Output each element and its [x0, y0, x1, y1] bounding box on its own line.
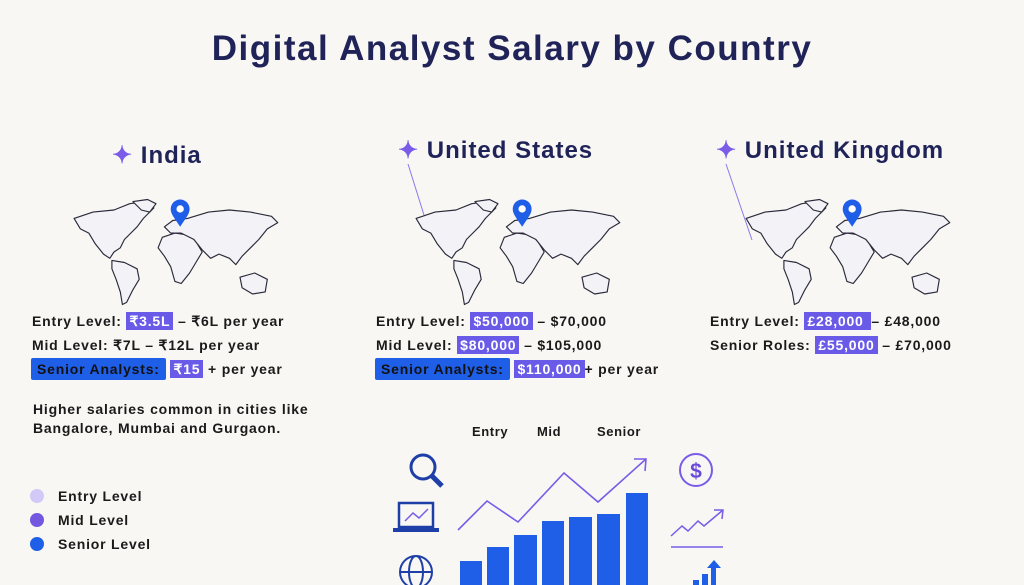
icon: magnifier: [411, 455, 442, 486]
chart: bar chart with trend: [393, 424, 724, 585]
legend: Entry Level: [58, 488, 142, 504]
map: UK: [746, 198, 950, 306]
note: Higher salaries common in cities like: [33, 401, 308, 417]
salary lines: Entry Level: ₹3.5L – ₹6L per year: [32, 313, 284, 329]
panel: United States: Mid Level: $80,000 – $105,000: [376, 337, 602, 353]
panel: India: Mid Level: ₹7L – ₹12L per year: [32, 337, 260, 353]
chart labels: Entry: [472, 424, 508, 439]
legend: [30, 488, 151, 552]
note: [33, 401, 308, 436]
bars: [460, 493, 648, 585]
chart labels: Senior: [597, 424, 641, 439]
legend: Senior Level: [58, 536, 151, 552]
salary lines: Entry Level: £28,000 – £48,000: [710, 313, 941, 329]
heading: India: ✦ India: [112, 142, 202, 169]
heading: United States: ✦ United States: [398, 137, 593, 164]
panel: United States: Senior Analysts: $110,000+ per year: [381, 361, 659, 377]
panel: India: Senior Analysts: ₹15 + per year: [37, 361, 283, 377]
icon: laptop: [393, 503, 439, 532]
icon: dollar: [680, 454, 712, 486]
chart labels: [472, 424, 641, 439]
legend: Mid Level: [58, 512, 129, 528]
chart labels: Mid: [537, 424, 561, 439]
map: US: [416, 198, 620, 306]
icon: dollar: $: [690, 460, 702, 483]
panel: India: [31, 142, 308, 436]
icon: growth line: [671, 510, 723, 547]
map: India: [74, 198, 278, 306]
trend arrow: [458, 459, 646, 530]
panel: United Kingdom: Senior Roles: £55,000 – £70,000: [710, 337, 952, 353]
panel: United States: [375, 137, 659, 380]
heading: United Kingdom: ✦ United Kingdom: [716, 137, 944, 164]
note: Bangalore, Mumbai and Gurgaon.: [33, 420, 281, 436]
panel: United Kingdom: [710, 137, 952, 354]
icon: globe: [400, 556, 432, 585]
icon: bar arrow: [693, 560, 721, 585]
salary lines: Entry Level: $50,000 – $70,000: [376, 313, 607, 329]
title: Digital Analyst Salary by Country: [212, 29, 812, 68]
